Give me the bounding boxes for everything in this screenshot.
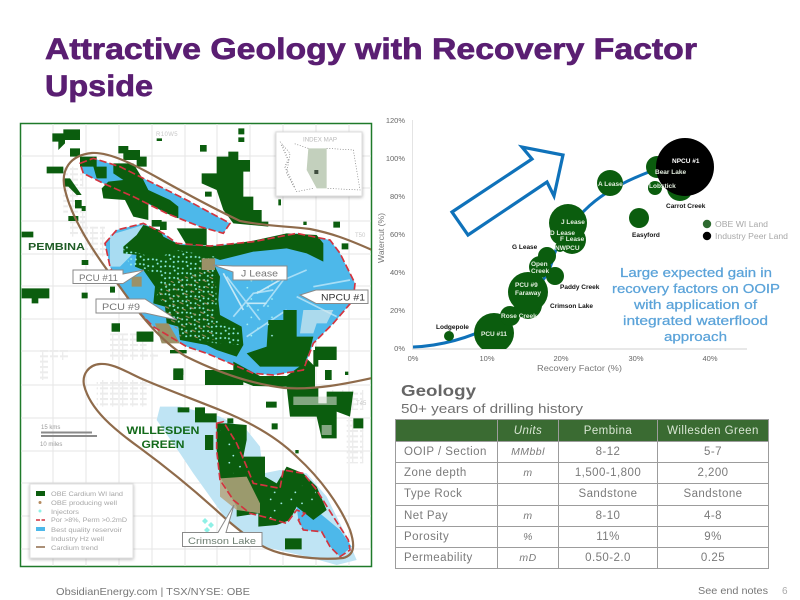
geology table <box>395 419 769 569</box>
bubble labels: PCU #11 <box>481 331 507 338</box>
geology table: MMbbl <box>511 446 545 458</box>
peer bubble: NPCU #1 <box>656 138 714 196</box>
x axis labels: 0% <box>408 354 419 363</box>
y axis labels: 20% <box>390 306 405 315</box>
callout: PCU #11: PCU #11 <box>79 273 118 284</box>
chart legend: Industry Peer Land <box>715 232 788 241</box>
geology table: Zone depth <box>404 467 467 479</box>
Pembina OBE land <box>22 128 348 367</box>
geology table: 8-10 <box>596 510 620 522</box>
callout: PCU #9: PCU #9 <box>102 302 140 313</box>
geology table: 8-12 <box>596 446 620 458</box>
bubble labels: G Lease <box>512 244 538 251</box>
geology table: 0.25 <box>701 552 725 564</box>
geology table: 1,500-1,800 <box>575 467 641 479</box>
y axis labels: 100% <box>386 154 405 163</box>
y axis labels: 120% <box>386 116 405 125</box>
bubble labels: Creek <box>531 268 549 275</box>
inset: index map: INDEX MAP <box>303 138 337 144</box>
scale bar: 15 kms <box>41 425 60 431</box>
bubble labels: PCU #9 <box>515 282 538 289</box>
bubble labels: Rose Creek <box>501 313 537 320</box>
callout: recovery factor gain <box>612 265 780 344</box>
callout: NPCU #1 <box>300 290 368 304</box>
geology table: 11% <box>596 531 620 543</box>
geology table: mD <box>519 552 537 564</box>
footer: source: ObsidianEnergy.com | TSX/NYSE: OBE <box>56 586 250 598</box>
scale bar: 10 miles <box>40 442 62 448</box>
Pembina dense dark core with injectors <box>110 240 280 385</box>
geology table: Sandstone <box>683 488 743 500</box>
callout: J Lease <box>213 265 287 280</box>
bubble labels: A Lease <box>598 181 623 188</box>
callout: recovery factor gain: with application of <box>633 297 757 312</box>
footer: end notes: See end notes <box>698 586 768 597</box>
map legend: Industry Hz well <box>51 537 104 543</box>
upside arrow <box>452 147 563 235</box>
bubble labels: Lodgepole <box>436 324 469 331</box>
map legend: Por >8%, Perm >0.2mD <box>51 518 128 524</box>
label: WILLESDEN GREEN <box>126 425 200 451</box>
bubble labels: F Lease <box>560 236 585 243</box>
scale bar <box>40 425 97 448</box>
y axis labels: 40% <box>390 268 405 277</box>
bubble labels: Paddy Creek <box>560 284 600 291</box>
geology table: Units <box>514 425 542 437</box>
geology table: % <box>523 531 533 543</box>
x axis labels: 10% <box>479 354 495 363</box>
bubble labels: Lobstick <box>649 183 676 190</box>
Willesden Green reservoir and land <box>40 350 363 565</box>
heading: Geology: Geology <box>401 383 476 400</box>
callout: recovery factor gain: recovery factors on OOIP <box>612 281 780 296</box>
geology table: Net Pay <box>404 510 448 522</box>
geology table: Pembina <box>584 425 632 437</box>
label: T45: T45 <box>356 401 367 407</box>
geology table: m <box>523 467 533 479</box>
callout: PCU #9 <box>96 299 177 320</box>
trend curve <box>413 158 690 347</box>
geology table: 4-8 <box>704 510 722 522</box>
map legend: OBE producing well <box>51 501 117 507</box>
bubble labels: NWPCU <box>555 245 580 252</box>
panel: map <box>20 124 372 566</box>
map legend: Injectors <box>51 510 79 516</box>
label: R10W5: R10W5 <box>156 132 178 138</box>
map legend <box>30 484 133 558</box>
title: Upside <box>45 70 153 103</box>
geology table: Willesden Green <box>667 425 759 437</box>
callout: Crimson Lake: Crimson Lake <box>188 536 256 547</box>
map legend: Cardium trend <box>51 546 98 552</box>
bubble labels <box>436 158 706 338</box>
geology table: 2,200 <box>697 467 729 479</box>
x axis labels: 20% <box>553 354 569 363</box>
x axis labels: 40% <box>702 354 718 363</box>
Cardium trend lines <box>64 153 372 559</box>
geology table: 0.50-2.0 <box>585 552 631 564</box>
geology table: Porosity <box>404 531 449 543</box>
callout: recovery factor gain: Large expected gain in <box>620 265 772 280</box>
OBE bubbles <box>444 156 693 353</box>
subheading: 50+ years of drilling history <box>401 401 584 416</box>
geology table: 9% <box>704 531 722 543</box>
bubble labels: Bear Lake <box>655 169 686 176</box>
chart legend: OBE WI Land <box>715 220 768 229</box>
y axis labels: 80% <box>390 192 405 201</box>
chart legend <box>703 220 788 241</box>
callout: recovery factor gain: approach <box>664 329 727 344</box>
red dashed high quality reservoir outlines <box>80 158 355 375</box>
geology table: OOIP / Section <box>404 446 487 458</box>
inset: index map <box>276 132 362 196</box>
geology table: 5-7 <box>704 446 722 458</box>
label: WILLESDEN GREEN: WILLESDEN <box>126 425 200 437</box>
callout: J Lease: J Lease <box>241 268 278 280</box>
bubble labels: NPCU #1 <box>672 158 700 165</box>
axis titles: Recovery Factor (%) <box>537 364 622 373</box>
bubble labels: Faraway <box>515 290 541 297</box>
label: WILLESDEN GREEN: GREEN <box>142 439 185 451</box>
callout: recovery factor gain: integrated waterflood <box>623 313 768 328</box>
bubble labels: Carrot Creek <box>666 203 706 210</box>
map legend: OBE Cardium WI land <box>51 492 123 498</box>
title <box>45 33 697 103</box>
bubble labels: Open <box>531 261 548 268</box>
label: PEMBINA: PEMBINA <box>28 242 85 253</box>
callout: Crimson Lake <box>182 505 262 547</box>
label: T50: T50 <box>355 233 366 239</box>
panel: recovery factor bubble chart: Watercut (%) <box>377 213 386 263</box>
callout: NPCU #1: NPCU #1 <box>321 292 365 304</box>
x axis labels: 30% <box>628 354 644 363</box>
geology table: Type Rock <box>404 488 462 500</box>
y axis labels <box>386 116 405 353</box>
page number: 6 <box>782 586 788 597</box>
bubble labels: D Lease <box>550 230 575 237</box>
bubble labels: Easyford <box>632 232 660 239</box>
geology table: Sandstone <box>578 488 638 500</box>
title: Attractive Geology with Recovery Factor <box>45 33 697 66</box>
map legend: Best quality reservoir <box>51 528 122 534</box>
panel: recovery factor bubble chart <box>377 116 788 373</box>
bubble labels: J Lease <box>561 219 585 226</box>
callout: PCU #11 <box>73 270 144 284</box>
geology table: m <box>523 510 533 522</box>
y axis labels: 0% <box>394 344 405 353</box>
bubble labels: Crimson Lake <box>550 303 593 310</box>
Pembina upper and main reservoir <box>63 158 355 375</box>
x axis labels <box>408 354 718 363</box>
geology table: Permeability <box>404 552 473 564</box>
y axis labels: 60% <box>390 230 405 239</box>
